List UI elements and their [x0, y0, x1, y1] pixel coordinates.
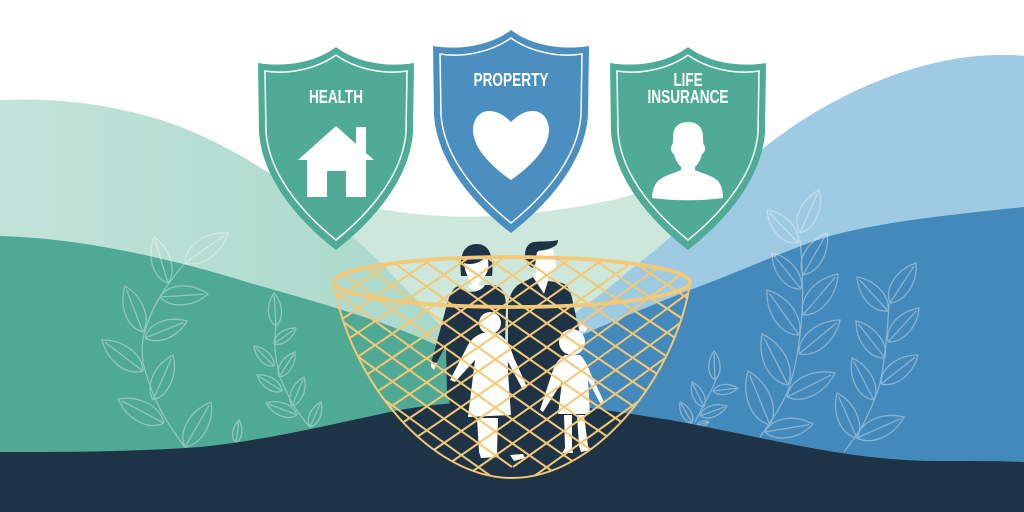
decorative sprig: far right: [828, 258, 926, 452]
label: life: LIFE: [674, 70, 702, 90]
label: health: HEALTH: [309, 87, 363, 107]
hill: pale green centre: [250, 150, 740, 420]
decorative sprig: left small: [231, 293, 326, 444]
decorative sprig: right tall: [737, 186, 847, 441]
man: [508, 240, 579, 461]
net bowl outline: [334, 284, 690, 478]
hill: light blue right: [560, 55, 1024, 420]
hill: light green left: [0, 100, 445, 420]
icon: heart: [473, 111, 549, 180]
hill: green left: [0, 236, 450, 470]
child: girl in dress: [450, 312, 527, 458]
shield: life insurance: [610, 47, 766, 250]
family group: [431, 240, 604, 461]
decorative sprig: right small: [676, 351, 739, 427]
icon: person: [652, 122, 723, 200]
shield: property: [433, 30, 589, 233]
shield: health: [258, 47, 414, 250]
woman: [431, 244, 510, 445]
net rim: [334, 257, 690, 307]
dark ground wave: [0, 401, 1024, 512]
label: property: PROPERTY: [474, 70, 548, 90]
label: insurance: INSURANCE: [648, 87, 728, 107]
icon: house: [298, 126, 374, 197]
safety net: [332, 255, 692, 479]
hill: blue right: [560, 207, 1024, 480]
decorative sprig: left large: [96, 224, 234, 452]
net lattice: [336, 258, 688, 475]
child: girl with bun: [540, 324, 604, 453]
